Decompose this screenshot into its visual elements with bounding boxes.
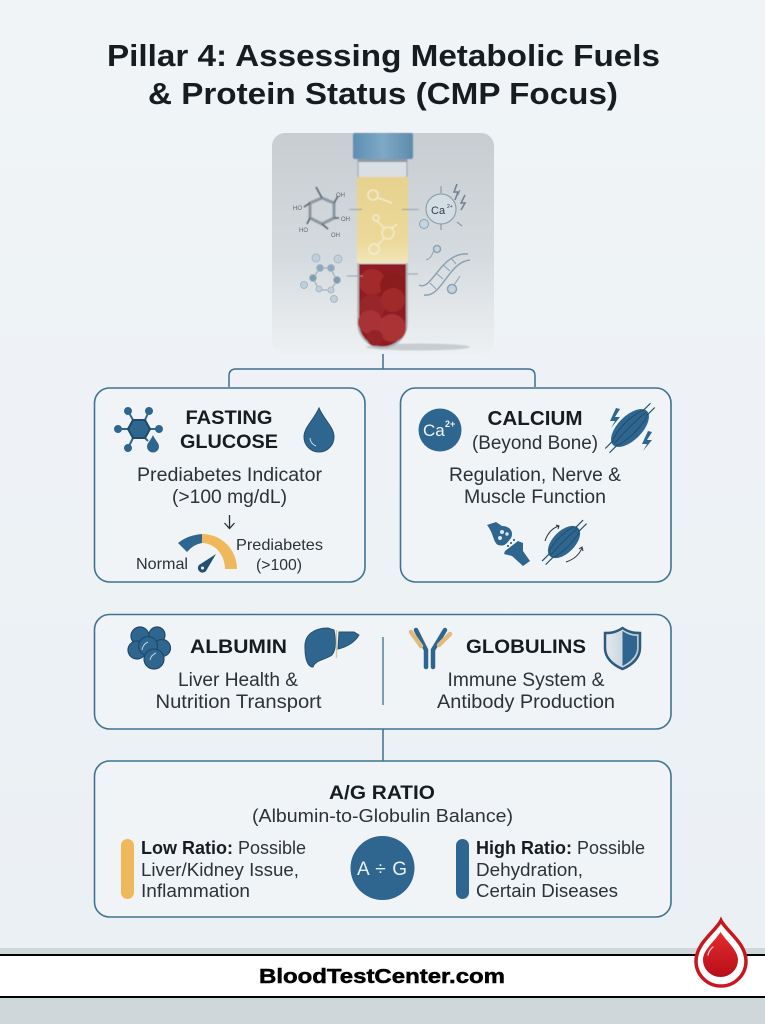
- heading: globulins: GLOBULINS: [466, 637, 586, 658]
- text: prediabetes indicator: [137, 465, 323, 508]
- connector: image to top cards: [229, 354, 535, 387]
- footer text: BloodTestCenter.com: [259, 966, 505, 988]
- icon: blood drop logo: [696, 920, 746, 986]
- panel: calcium: [400, 388, 671, 582]
- icon: muscle contraction: [536, 514, 592, 570]
- arrow: down: [224, 515, 234, 528]
- icon: hexagon molecule: [300, 254, 342, 302]
- heading: fasting glucose: GLUCOSE: [180, 432, 278, 453]
- panel: fasting glucose: [94, 388, 365, 582]
- heading: calcium: CALCIUM: [488, 408, 582, 430]
- text: regulation: Muscle Function: [464, 487, 606, 508]
- text: prediabetes indicator: (>100 mg/dL): [172, 487, 287, 508]
- labels: glucose molecule: [293, 193, 350, 239]
- title: Pillar 4: Assessing Metabolic Fuels: [107, 38, 660, 73]
- icon: DNA helix: [419, 246, 470, 295]
- text: globulins description: Immune System &: [448, 670, 605, 691]
- icon: calcium ion: Ca: [431, 205, 446, 217]
- icon: test tube: [353, 133, 413, 347]
- icon: calcium ion badge: [418, 408, 462, 452]
- text: globulins description: Antibody Production: [437, 692, 615, 713]
- labels: glucose molecule: HO: [299, 228, 308, 234]
- label: prediabetes threshold: (>100): [256, 557, 302, 574]
- labels: glucose molecule: OH: [331, 233, 340, 239]
- heading: A/G ratio: A/G RATIO: [329, 783, 435, 804]
- text: regulation: [449, 465, 621, 508]
- connector: middle to ratio card: [382, 729, 384, 761]
- icon: glucose hexagon: [114, 408, 162, 453]
- label: prediabetes threshold: [236, 537, 323, 574]
- icon: calcium ion: 2+: [447, 204, 453, 210]
- text: albumin description: Liver Health &: [178, 670, 298, 691]
- text: ratio subtitle: (Albumin-to-Globulin Balance): [252, 806, 513, 826]
- icon: antibody: [411, 630, 450, 667]
- text: prediabetes indicator: Prediabetes Indicator: [137, 465, 323, 486]
- text: low ratio: Inflammation: [141, 881, 250, 901]
- text: high ratio: Certain Diseases: [476, 881, 618, 901]
- text: regulation: Regulation, Nerve &: [449, 465, 621, 486]
- text: globulins description: [437, 670, 615, 713]
- labels: glucose molecule: OH: [341, 217, 350, 223]
- icon: calcium ion badge: Ca: [423, 421, 445, 440]
- title: & Protein Status (CMP Focus): [148, 76, 618, 111]
- label: normal: Normal: [136, 556, 188, 573]
- icon: tube shadow: [366, 344, 470, 350]
- text: beyond bone: (Beyond Bone): [472, 433, 598, 454]
- labels: glucose molecule: OH: [336, 193, 345, 199]
- heading: fasting glucose: FASTING: [186, 408, 272, 429]
- indicator: high ratio bar: [456, 839, 469, 899]
- icon: glucose molecule: [304, 187, 419, 276]
- panel: test tube illustration: [272, 133, 494, 354]
- icon: water drop: [304, 408, 334, 452]
- indicator: low ratio bar: [121, 839, 134, 899]
- icon: shield: [605, 628, 640, 669]
- label: prediabetes threshold: Prediabetes: [236, 537, 323, 554]
- heading: albumin: ALBUMIN: [190, 637, 287, 658]
- footer band: [0, 948, 765, 1024]
- panel: A/G ratio: [94, 761, 671, 917]
- icon: muscle with lightning: [599, 397, 661, 459]
- labels: glucose molecule: HO: [293, 206, 302, 212]
- title: [107, 38, 660, 111]
- panel: albumin and globulins: [94, 614, 671, 729]
- text: high ratio: [476, 838, 645, 901]
- text: high ratio: Dehydration,: [476, 860, 583, 880]
- icon: calcium ion badge: 2+: [445, 419, 455, 429]
- icon: liver: [305, 628, 359, 667]
- icon: A divided by G: [350, 836, 414, 900]
- text: albumin description: [156, 670, 322, 713]
- text: high ratio: High Ratio: Possible: [476, 838, 645, 858]
- heading: fasting glucose: [180, 408, 278, 453]
- icon: A divided by G: A ÷ G: [357, 859, 407, 880]
- text: low ratio: Low Ratio: Possible: [141, 838, 306, 858]
- divider: [382, 637, 384, 705]
- icon: synapse: [487, 522, 530, 566]
- icon: calcium ion: [420, 184, 465, 230]
- text: low ratio: Liver/Kidney Issue,: [141, 860, 299, 880]
- text: albumin description: Nutrition Transport: [156, 692, 322, 713]
- chart: gauge: [178, 534, 237, 573]
- icon: albumin protein cluster: [128, 627, 170, 669]
- text: low ratio: [141, 838, 306, 901]
